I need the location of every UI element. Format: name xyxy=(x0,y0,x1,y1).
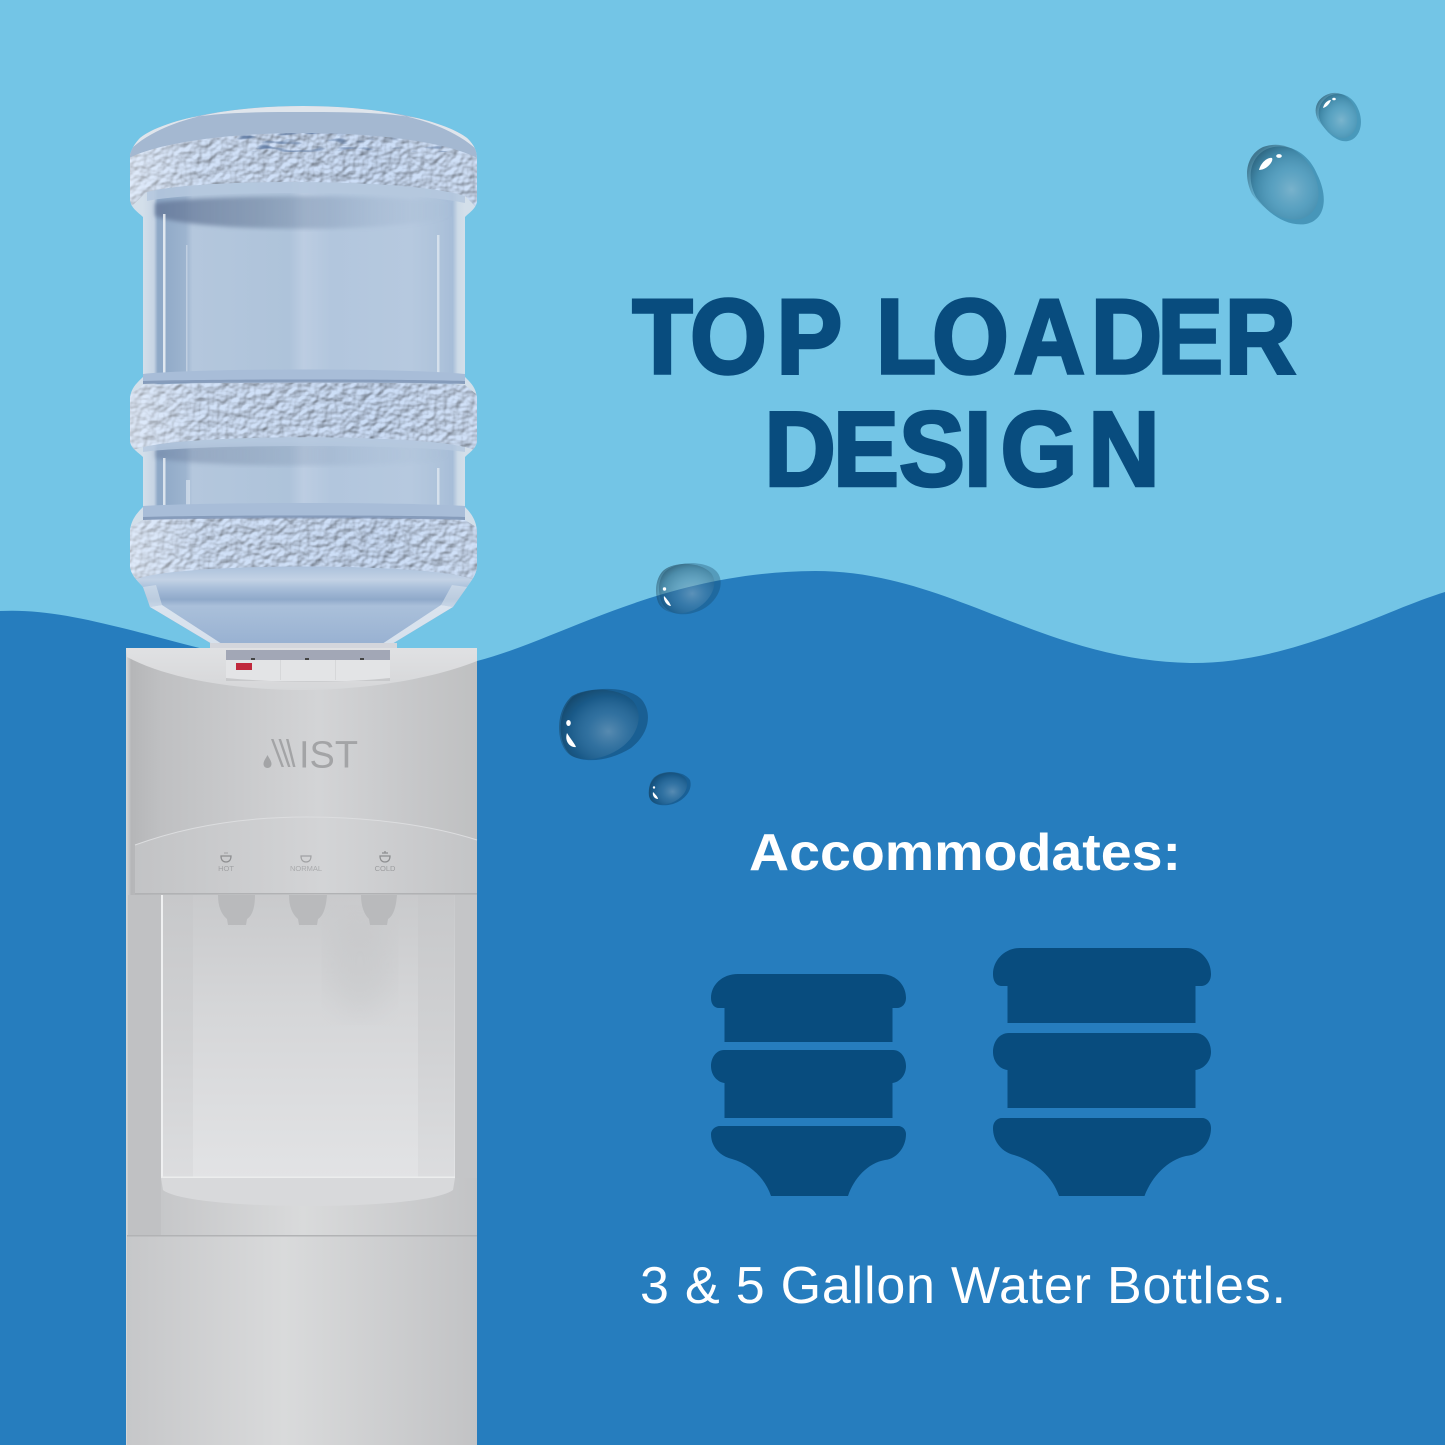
lower cabinet xyxy=(127,1236,477,1445)
subheading: Accommodates: xyxy=(749,824,1181,882)
highlights xyxy=(163,214,166,377)
shadow under top band xyxy=(152,195,390,230)
top cap xyxy=(126,648,477,690)
caption: 3 & 5 Gallon Water Bottles. xyxy=(640,1257,1286,1315)
dispensing window xyxy=(161,895,455,1178)
title xyxy=(632,277,1296,508)
side panel xyxy=(128,895,161,1235)
water drop: large on dark water xyxy=(559,689,648,760)
normal label and cup icon xyxy=(290,856,322,873)
drip tray xyxy=(161,1178,455,1206)
top rim xyxy=(130,106,477,158)
water drop: large top right xyxy=(1247,145,1324,224)
water dispenser cabinet xyxy=(126,648,477,1445)
wave: dark blue water xyxy=(0,571,1445,1445)
water drop: small top right xyxy=(1316,93,1361,141)
cold label and cup icon: COLD xyxy=(375,864,396,873)
icon: 5 gallon bottle xyxy=(993,948,1211,1196)
normal label and cup icon: NORMAL xyxy=(290,864,322,873)
icon: 3 gallon bottle xyxy=(711,974,906,1196)
lower taper xyxy=(134,566,474,643)
logo: MIST xyxy=(264,734,358,776)
hot label and cup icon xyxy=(218,853,234,873)
control fascia xyxy=(135,817,477,894)
indicator panel xyxy=(226,650,390,682)
textured bands xyxy=(125,118,481,588)
cold label and cup icon xyxy=(375,851,396,873)
water bottle xyxy=(125,100,481,650)
pale rings below bands xyxy=(147,186,465,203)
bottle collar xyxy=(210,643,397,650)
hot label and cup icon: HOT xyxy=(218,864,234,873)
tray surround xyxy=(161,1178,477,1236)
shadow under middle band xyxy=(153,446,350,466)
title: TOP LOADER xyxy=(632,277,1296,396)
title: DESIGN xyxy=(764,389,1160,508)
water drop: small on dark water xyxy=(649,772,691,805)
logo: MIST: IST xyxy=(299,734,358,776)
faucets xyxy=(218,895,397,925)
water drop: on wave line xyxy=(656,563,721,614)
